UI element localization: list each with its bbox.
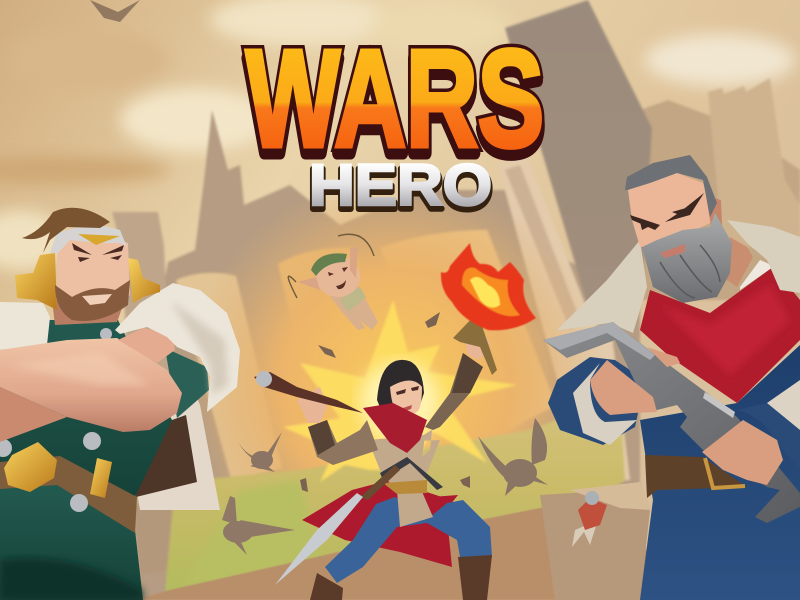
upper arm (0, 338, 182, 432)
trousers (0, 485, 143, 600)
left sleeve (548, 357, 645, 445)
center hero (254, 313, 497, 600)
tiny knight (572, 491, 607, 547)
arch opening right (380, 230, 556, 450)
scarf (363, 403, 427, 453)
torso (0, 320, 172, 497)
flame (441, 243, 536, 330)
goblin face (328, 267, 348, 289)
neck (52, 300, 125, 325)
beard (55, 280, 130, 321)
mace (254, 372, 363, 413)
central glow (170, 200, 620, 540)
gold clasp (90, 458, 112, 498)
left round tower (112, 212, 178, 570)
arch opening middle (278, 248, 420, 480)
column shade stripe (505, 165, 580, 330)
red shirt highlight (660, 285, 790, 375)
neck (727, 237, 753, 287)
left arm (308, 420, 378, 465)
title WARS fill: WARS (246, 22, 544, 176)
arm highlight (10, 352, 150, 385)
right arm (425, 353, 483, 430)
goblin loincloth (340, 287, 366, 312)
right cloak (727, 220, 800, 293)
flame middle (462, 268, 520, 316)
eyes and brows (72, 243, 124, 262)
knight legs (572, 520, 598, 547)
left cloak (557, 240, 647, 333)
tall central tower (505, 0, 652, 320)
beard strands (660, 245, 720, 298)
trousers shade (0, 558, 143, 600)
sleeve (165, 348, 209, 418)
dark crossbelt strap (380, 457, 443, 490)
sleeve cuff (573, 363, 637, 445)
gun (543, 322, 800, 523)
left castle silhouette (130, 110, 640, 600)
clouds (0, 0, 795, 270)
red cape (302, 480, 452, 567)
face (57, 235, 130, 311)
bright field strip (185, 480, 320, 585)
flame outer (441, 243, 536, 330)
eyebrows and eyes (630, 193, 704, 230)
goblin head (316, 257, 360, 297)
creature: bat right (478, 418, 548, 496)
small creatures (90, 0, 470, 492)
right hero (543, 155, 800, 600)
right sleeve (737, 403, 800, 470)
gun ridge (703, 392, 735, 418)
sword (275, 493, 363, 585)
red shirt (640, 267, 800, 403)
left cuff dark (308, 420, 335, 455)
subtitle HERO fill: HERO (309, 153, 492, 218)
bat feet (250, 462, 275, 472)
beard (642, 213, 732, 303)
right red cape (418, 495, 458, 520)
green field (165, 395, 625, 592)
left earcup (15, 253, 57, 310)
flame center (470, 277, 500, 308)
right hand (465, 323, 490, 360)
upper hand (647, 347, 680, 367)
legs (325, 497, 492, 583)
gold buckle (4, 442, 57, 492)
torso and trousers (640, 345, 800, 600)
face (390, 380, 422, 420)
flying goblin (288, 234, 378, 330)
cape inner (134, 415, 197, 497)
belt (383, 480, 427, 494)
left hero (0, 208, 240, 600)
creature: bat left (238, 432, 282, 472)
title WARS outline: WARS (246, 22, 544, 176)
face features (396, 386, 419, 395)
gold headband crest (78, 234, 120, 245)
goblin cap (311, 253, 347, 276)
hand (118, 328, 175, 363)
silver headband (50, 223, 127, 253)
subtitle HERO shadow: HERO (309, 157, 492, 222)
torso tunic (368, 435, 425, 490)
stone block top (570, 482, 652, 510)
right crenellated tower (708, 78, 800, 260)
lips (403, 405, 412, 411)
rivets (0, 328, 112, 512)
bright column edge (498, 152, 630, 480)
cape (135, 362, 220, 510)
right earcup (128, 258, 160, 303)
left fur collar (0, 302, 50, 350)
stone block foreground (540, 490, 650, 600)
white collar (740, 260, 773, 290)
starburst (283, 300, 517, 482)
right towers (640, 100, 800, 300)
hair (22, 208, 110, 253)
torso (370, 430, 440, 527)
goblin whips (288, 234, 374, 298)
starburst core (360, 362, 440, 442)
creature: bird lower left (222, 496, 295, 555)
belt buckle (705, 458, 745, 488)
ear and neck (706, 196, 722, 232)
goblin ears (298, 247, 358, 290)
title WARS shadow: WARS (246, 29, 544, 183)
title (246, 22, 544, 222)
road (135, 490, 660, 600)
brown strap (360, 465, 400, 500)
fur shade (170, 300, 228, 395)
arch opening left (176, 273, 282, 482)
torch handle (453, 313, 497, 375)
hair (377, 360, 424, 412)
bat body (503, 459, 537, 487)
gun highlight (543, 322, 655, 360)
mouth (660, 244, 685, 258)
left hand (590, 360, 657, 415)
belt (0, 456, 137, 533)
right hand (702, 420, 783, 485)
bat legs (505, 470, 548, 496)
face (628, 173, 717, 247)
hair (625, 155, 717, 217)
belt (645, 455, 747, 498)
boots (310, 555, 492, 600)
mace head (256, 371, 272, 387)
bird body (223, 521, 253, 543)
goblin body (325, 283, 378, 330)
knight body (578, 498, 607, 530)
right cuff dark (452, 353, 483, 393)
lower arm (0, 387, 67, 442)
right arm cloak (767, 380, 800, 430)
column base (133, 500, 180, 575)
bat body (251, 451, 273, 469)
left hand (297, 387, 327, 423)
chin patch (82, 294, 112, 305)
right fur (115, 283, 240, 412)
